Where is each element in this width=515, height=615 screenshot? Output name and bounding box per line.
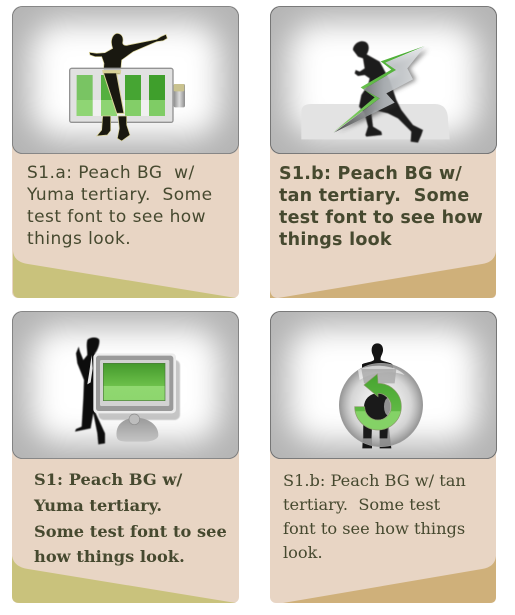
person belt and centre sliver through battery bbox=[103, 71, 124, 113]
caption text: things look bbox=[279, 230, 392, 250]
person torso inside ring bbox=[364, 393, 391, 420]
card: S1 peach with Yuma tertiary, bold serif bbox=[12, 311, 239, 603]
tertiary corner: tan bbox=[270, 251, 496, 298]
caption text: S1: Peach BG w/ bbox=[34, 470, 182, 489]
icon: glass sphere bbox=[339, 363, 423, 447]
tertiary corner: Yuma bbox=[13, 251, 236, 298]
caption text: Yuma tertiary. Some bbox=[26, 185, 213, 205]
icon: person silhouette bbox=[89, 33, 167, 72]
card: S1.b peach with tan tertiary, regular serif bbox=[270, 311, 497, 603]
icon: person silhouette bbox=[362, 343, 393, 372]
caption text: font to see how things bbox=[283, 519, 465, 538]
icon: battery bbox=[70, 68, 185, 122]
ground panel bbox=[301, 104, 450, 139]
card body bbox=[12, 435, 239, 603]
caption text: Yuma tertiary. bbox=[33, 496, 162, 515]
monitor screen bbox=[103, 363, 165, 401]
card body bbox=[270, 435, 496, 603]
icon: green refresh arrow bbox=[355, 374, 401, 430]
icon: lightning bolt green edge bbox=[333, 46, 425, 133]
tertiary corner: Yuma bbox=[12, 556, 236, 603]
caption text: S1.b: Peach BG w/ bbox=[279, 164, 462, 184]
icon: monitor bbox=[93, 353, 180, 442]
card body bbox=[270, 130, 496, 298]
icon: runner silhouette bbox=[353, 41, 423, 143]
monitor stand bbox=[116, 418, 158, 442]
icon: lightning bolt glass body bbox=[334, 47, 425, 133]
caption text: look. bbox=[283, 543, 323, 562]
shirt and tie highlight bbox=[87, 355, 93, 384]
card: S1.a peach with Yuma tertiary bbox=[12, 6, 239, 298]
image panel: person and battery bbox=[12, 6, 239, 154]
caption text: tertiary. Some test bbox=[283, 495, 441, 514]
caption text: S1.a: Peach BG w/ bbox=[27, 163, 195, 183]
caption text: test font to see how bbox=[279, 208, 483, 228]
icon: businessman silhouette bbox=[75, 337, 105, 444]
person legs and feet bbox=[97, 116, 130, 141]
card body bbox=[12, 130, 239, 298]
caption text: tan tertiary. Some bbox=[279, 186, 470, 206]
caption text: test font to see how bbox=[27, 207, 206, 227]
person legs and feet bbox=[362, 425, 391, 448]
image panel: runner and lightning bolt bbox=[270, 6, 497, 154]
caption text: things look. bbox=[27, 229, 131, 249]
caption text: how things look. bbox=[34, 547, 185, 566]
caption text: Some test font to see bbox=[34, 522, 227, 541]
tertiary corner: tan bbox=[283, 556, 496, 603]
icon: lightning bolt shadow bbox=[338, 49, 428, 132]
caption text: S1.b: Peach BG w/ tan bbox=[283, 471, 466, 490]
image panel: businessman and monitor bbox=[12, 311, 239, 459]
sphere highlight bbox=[358, 366, 405, 380]
image panel: person and refresh sphere bbox=[270, 311, 497, 459]
card: S1.b peach with tan tertiary, bold sans bbox=[270, 6, 497, 298]
person chest seen through sphere bbox=[361, 369, 396, 383]
person legs through sphere bbox=[363, 425, 388, 438]
